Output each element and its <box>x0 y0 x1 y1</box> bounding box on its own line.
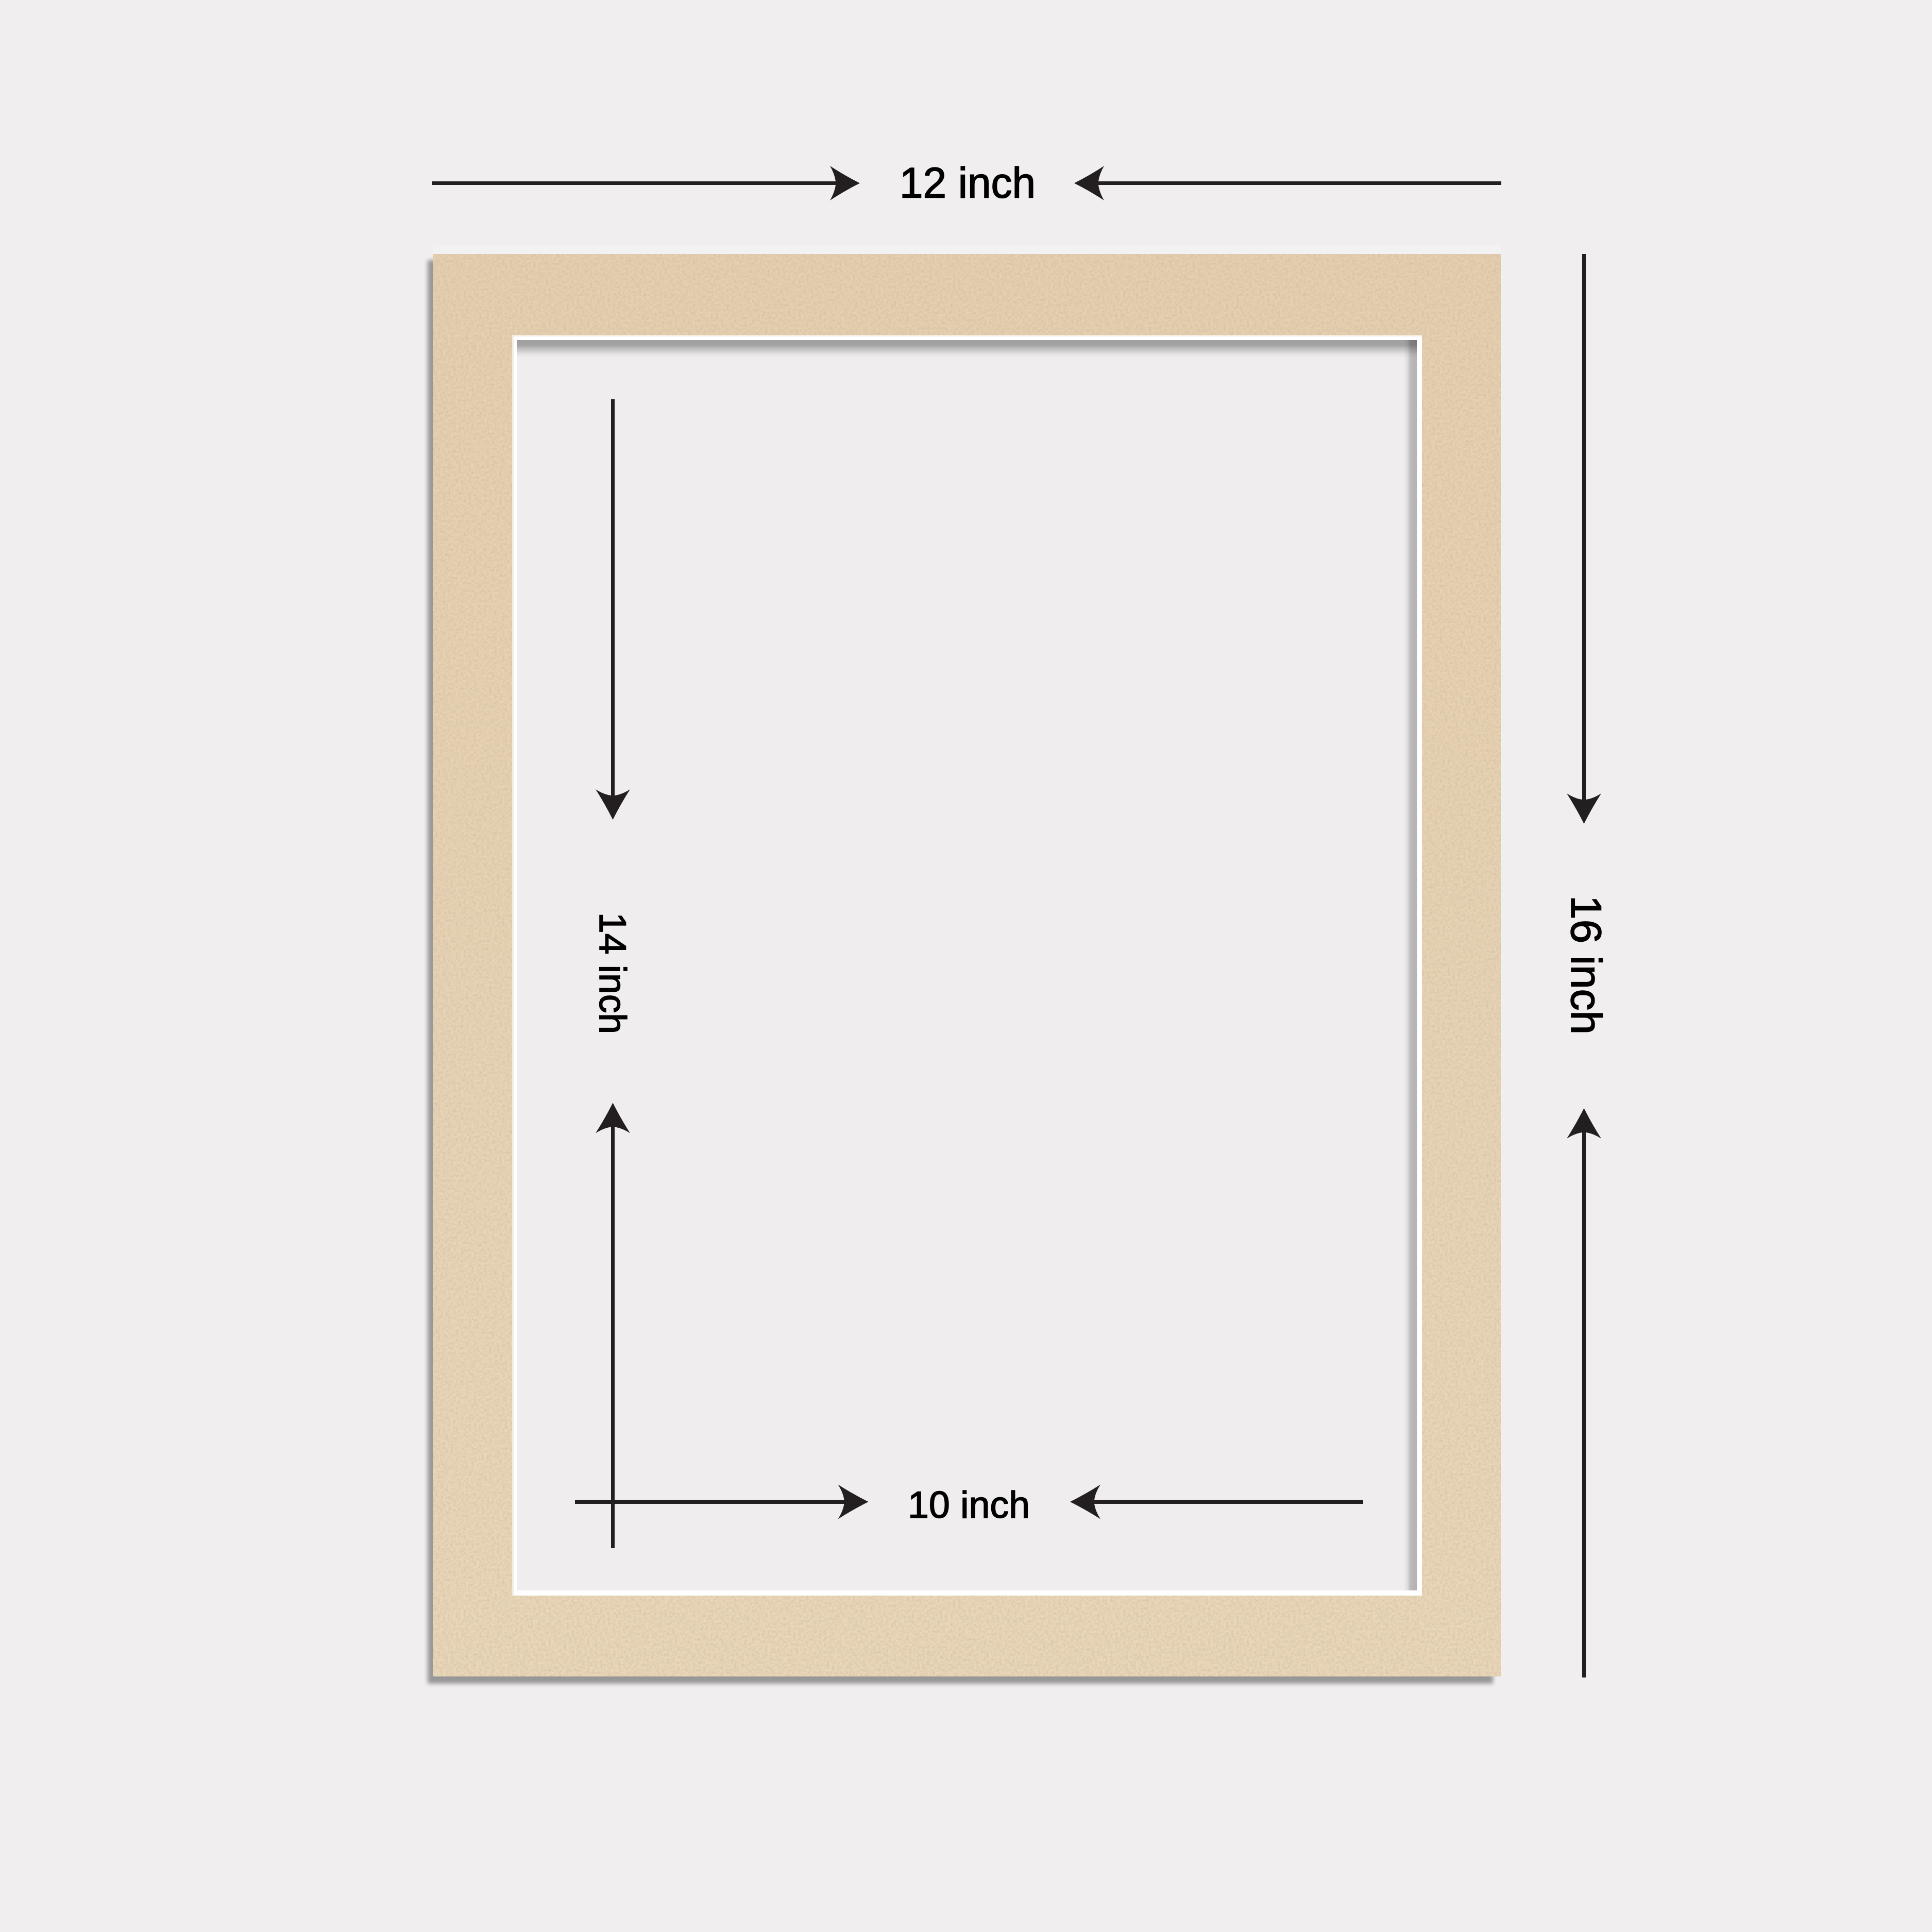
window opening with bevel <box>512 335 1422 1596</box>
label: 10 inch: 10 inch <box>908 1483 1030 1526</box>
arrow: left upper pointing down <box>596 399 630 820</box>
arrow: top left pointing right <box>432 166 860 200</box>
arrow: bottom left pointing right <box>575 1485 869 1519</box>
dimension: 14 inch window height <box>591 399 634 1548</box>
label: 16 inch: 16 inch <box>1562 895 1611 1035</box>
inner top shadow <box>517 340 1417 358</box>
arrow: bottom right pointing left <box>1070 1485 1363 1519</box>
arrow: top right pointing left <box>1074 166 1501 200</box>
bevel cream edge <box>512 335 1422 1596</box>
white bevel <box>514 336 1422 1596</box>
mat drop shadow <box>428 260 1493 1684</box>
mat board surface <box>433 254 1501 1676</box>
mat top highlight <box>433 245 1501 254</box>
inner right shadow <box>1403 340 1417 1590</box>
label: 14 inch: 14 inch <box>591 912 634 1034</box>
mat board frame <box>428 245 1501 1684</box>
arrow: left lower pointing up <box>596 1103 630 1548</box>
arrow: right upper pointing down <box>1567 254 1601 824</box>
dimension: 16 inch outer height <box>1562 254 1611 1677</box>
dimension: 12 inch outer width <box>432 158 1501 207</box>
arrow: right lower pointing up <box>1567 1108 1601 1677</box>
mat board paper grain <box>433 254 1501 1676</box>
window interior <box>517 340 1417 1590</box>
label: 12 inch: 12 inch <box>900 158 1036 207</box>
dimension: 10 inch window width <box>575 1483 1363 1526</box>
